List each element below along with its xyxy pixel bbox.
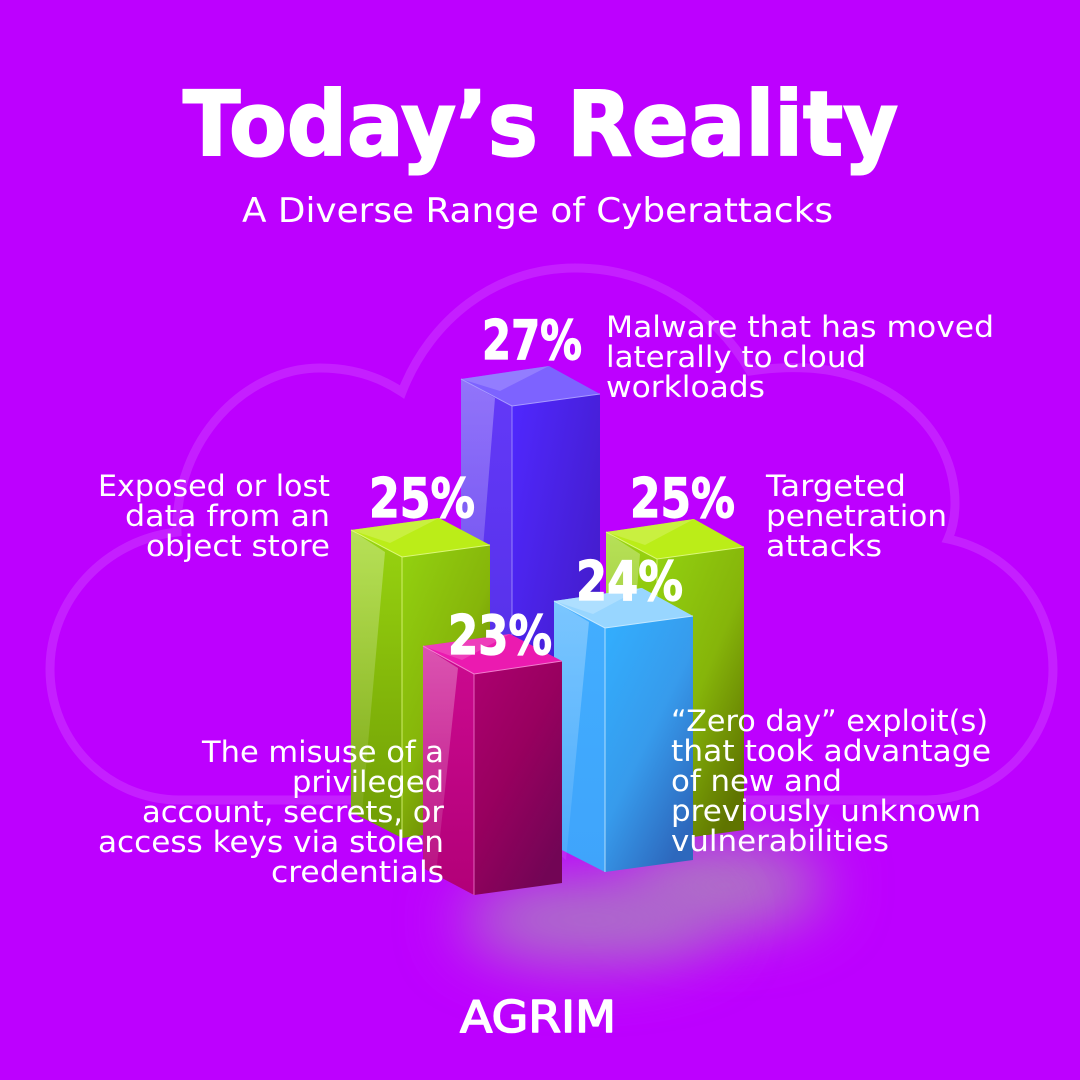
- value: 24%: 24%: [576, 550, 683, 613]
- bar: 25% green right: [606, 519, 744, 842]
- bar: 27% purple: [461, 366, 600, 850]
- label: privileged account misuse: The misuse of a: [201, 735, 444, 769]
- label: zero day: [671, 704, 991, 858]
- label: malware: workloads: [606, 370, 765, 404]
- label: targeted penetration: [765, 469, 947, 563]
- label: targeted penetration: Targeted: [765, 469, 906, 503]
- glow under bars: [460, 843, 825, 962]
- label: zero day: vulnerabilities: [671, 824, 889, 858]
- value: 23%: 23%: [448, 604, 552, 667]
- label: zero day: previously unknown: [671, 794, 981, 828]
- cloud outline: [50, 268, 1053, 800]
- bar: 25% green left: [351, 518, 490, 838]
- value: 25% left: 25%: [369, 467, 475, 530]
- subtitle: A Diverse Range of Cyberattacks: [242, 191, 833, 231]
- label: malware: [606, 310, 994, 404]
- title: Today’s Reality: [183, 72, 898, 176]
- label: exposed data: [98, 469, 330, 563]
- label: privileged account misuse: privileged: [292, 765, 444, 799]
- label: targeted penetration: attacks: [766, 529, 882, 563]
- label: exposed data: object store: [146, 529, 330, 563]
- label: zero day: that took advantage: [671, 734, 991, 768]
- label: zero day: of new and: [671, 764, 842, 798]
- label: exposed data: Exposed or lost: [98, 469, 330, 503]
- label: targeted penetration: penetration: [766, 499, 947, 533]
- label: privileged account misuse: access keys via stolen: [98, 825, 444, 859]
- label: privileged account misuse: credentials: [271, 855, 444, 889]
- bar: 23% magenta: [423, 634, 562, 895]
- logo: AGRIM: AGRIM: [460, 992, 616, 1043]
- value: 25% right: 25%: [630, 467, 735, 530]
- bar: 24% blue: [554, 588, 693, 872]
- label: privileged account misuse: [98, 735, 444, 889]
- label: malware: Malware that has moved: [606, 310, 994, 344]
- label: privileged account misuse: account, secrets, or: [142, 795, 444, 829]
- label: malware: laterally to cloud: [606, 340, 866, 374]
- value: 27%: 27%: [482, 309, 582, 372]
- label: zero day: “Zero day” exploit(s): [671, 704, 988, 738]
- label: exposed data: data from an: [125, 499, 330, 533]
